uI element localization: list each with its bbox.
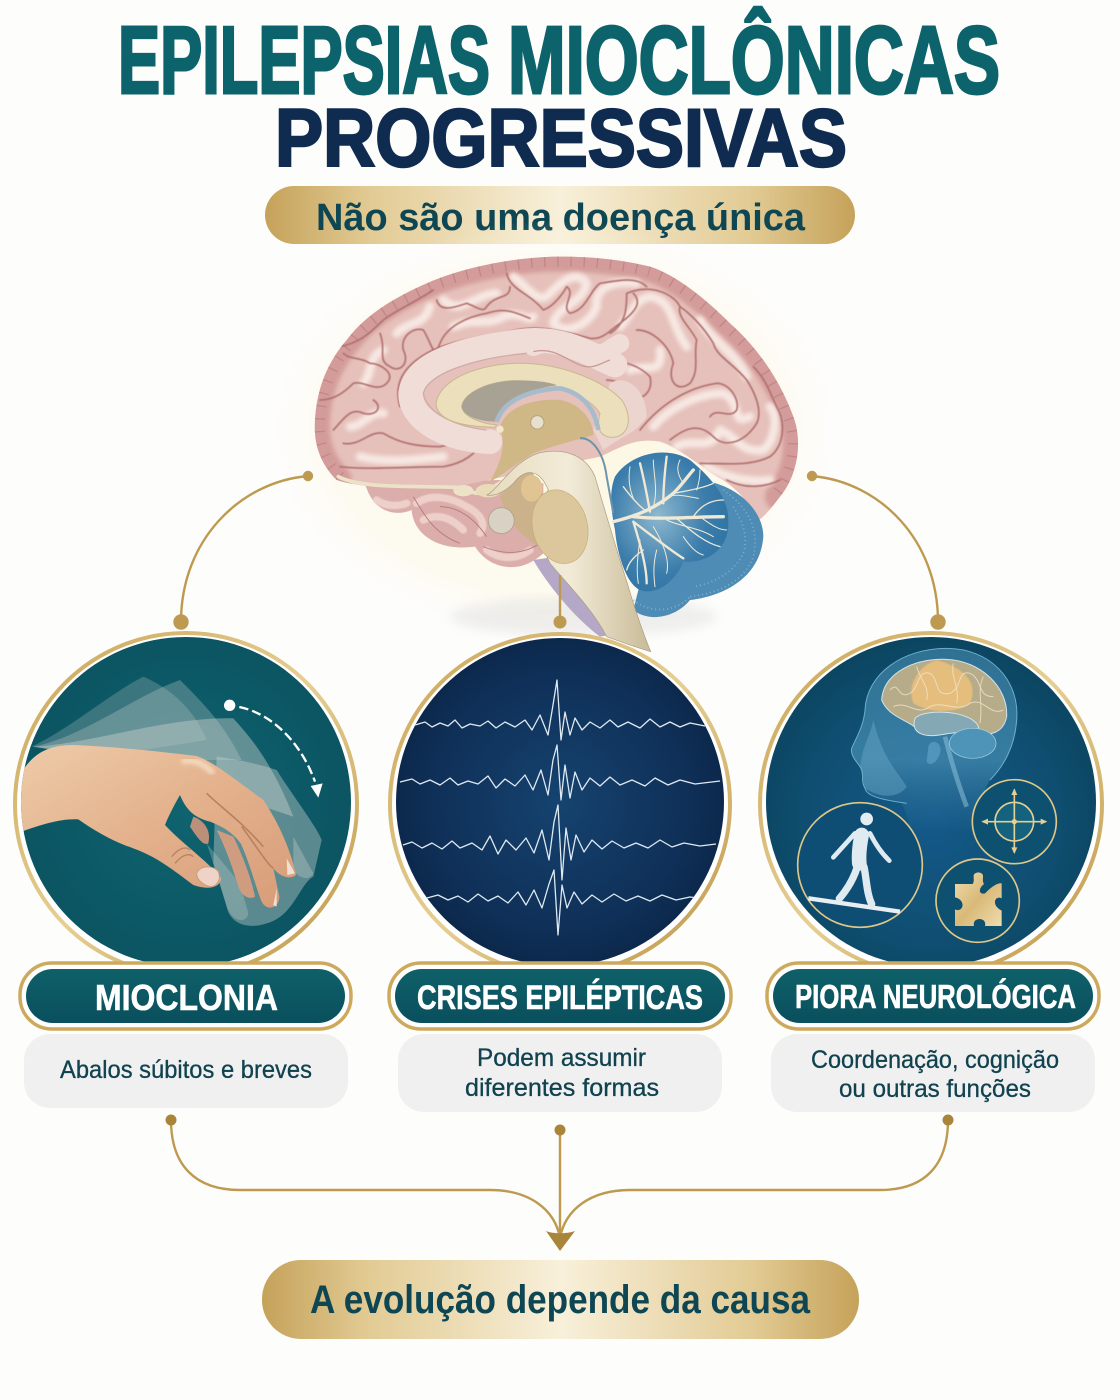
finger lines (207, 793, 273, 868)
connectors: brain to circles (174, 472, 944, 628)
brain glow (265, 220, 845, 640)
icon: balance walker (798, 803, 922, 927)
forearm and hand (17, 745, 296, 908)
brain illustration (315, 257, 798, 652)
title word: epilepsias: EPILEPSIAS (118, 7, 490, 114)
label: crises epilépticas (389, 963, 731, 1029)
ear (927, 742, 941, 764)
panel: piora neurológica (760, 633, 1102, 975)
pituitary and midbrain detail (500, 467, 547, 550)
gyrus highlights (350, 277, 775, 481)
icon: puzzle piece (936, 859, 1019, 942)
label: crises epilépticas: CRISES EPILÉPTICAS (417, 979, 703, 1017)
outer cortex rim (315, 257, 798, 497)
brainstem (945, 737, 967, 807)
description: piora: Coordenação, cognição (811, 1046, 1059, 1074)
head brain (882, 659, 1007, 734)
gyri and sulci (315, 257, 798, 497)
subtitle pill (265, 186, 855, 244)
ghost hands (32, 677, 322, 926)
converging connectors and arrow (166, 1114, 954, 1251)
temporal (914, 712, 978, 736)
title (118, 6, 1000, 184)
optic tract (338, 470, 517, 493)
temporal lobe (365, 480, 543, 567)
circle frame (390, 634, 730, 974)
description: crises (398, 1034, 722, 1112)
circle frame (15, 633, 357, 975)
septum (462, 381, 557, 422)
subtitle text: Não são uma doença única (316, 197, 806, 239)
description: piora (771, 1034, 1095, 1112)
cerebellum (611, 452, 763, 617)
description: crises: diferentes formas (465, 1074, 659, 1102)
thumbnail (197, 867, 219, 887)
circle frame (760, 633, 1102, 975)
corpus callosum (436, 363, 628, 437)
fornix band (497, 388, 598, 430)
cerebellum (949, 728, 996, 758)
panel: crises epilépticas (390, 634, 730, 974)
chart: EEG traces (400, 680, 720, 935)
back finger (217, 830, 255, 898)
label: piora neurológica (767, 963, 1099, 1029)
description: mioclonia (24, 1034, 348, 1108)
conclusion pill: A evolução depende da causa (310, 1278, 811, 1322)
brain shadow (450, 597, 717, 637)
icon: target (972, 780, 1056, 864)
label: mioclonia: MIOCLONIA (95, 977, 278, 1018)
label: mioclonia (20, 963, 351, 1029)
brainstem (487, 451, 651, 652)
connector: brain to center circle (554, 575, 566, 628)
thalamus (490, 400, 593, 482)
panel: mioclonia (15, 633, 357, 975)
title line 2: PROGRESSIVAS (275, 93, 847, 184)
icon: head profile with brain (850, 648, 1018, 814)
icon: hand in motion (17, 677, 323, 926)
cingulate gyrus (411, 340, 615, 442)
pons (524, 484, 596, 570)
cerebrum (315, 257, 798, 520)
aqueduct (580, 438, 613, 513)
conclusion pill (262, 1260, 859, 1339)
arbor vitae (613, 457, 727, 587)
description: crises: Podem assumir (477, 1044, 646, 1072)
description: piora: ou outras funções (839, 1075, 1031, 1103)
description: mioclonia: Abalos súbitos e breves (60, 1056, 312, 1084)
motion arrow (224, 700, 323, 798)
sulci (320, 273, 782, 486)
spinal cord, violet nerve (533, 557, 620, 637)
